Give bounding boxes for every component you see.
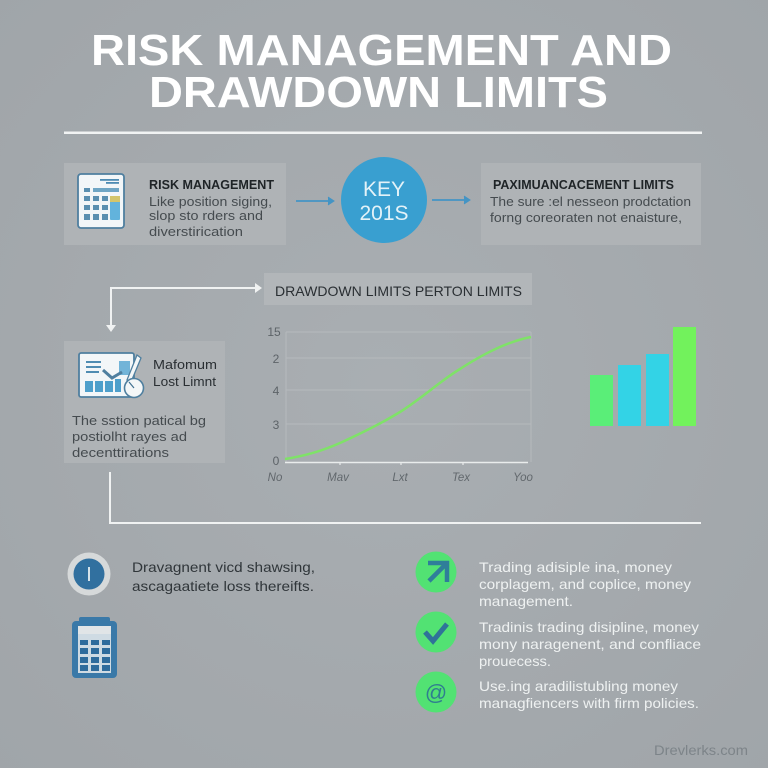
note text: ascagaatiete loss thereifts. (132, 578, 314, 594)
text: trading discipline one: corplagem, and coplice, money (479, 576, 691, 592)
text: trading discipline one: management. (479, 593, 573, 609)
panel heading: maximum lost limit: Mafomum (153, 358, 217, 372)
title (91, 26, 672, 117)
panel: maximum lost limit (64, 341, 225, 463)
panel text: maximum lost limit (72, 413, 206, 460)
title: RISK MANAGEMENT AND (91, 26, 672, 75)
panel heading: limits: PAXIMUANCACEMENT LIMITS (493, 178, 674, 192)
icon: calculator sheet (78, 174, 124, 228)
y axis labels (267, 325, 281, 468)
key circle (341, 157, 427, 243)
panel text: limits: forng coreoraten not enaisture, (490, 210, 682, 225)
panel text: maximum lost limit: decenttirations (72, 445, 170, 460)
panel heading: maximum lost limit (153, 358, 217, 389)
panel heading: risk management: RISK MANAGEMENT (149, 178, 274, 192)
icon: calculator (72, 617, 117, 678)
panel text: limits: The sure :el nesseon prodctation (490, 194, 691, 209)
panel text: risk management: diverstirication (149, 224, 243, 239)
bar chart (590, 327, 696, 426)
icon: at badge: @ (425, 680, 447, 705)
text: trading discipline one: Trading adisiple ina, money (479, 559, 672, 575)
text: trading discipline two: Tradinis trading disipline, money (479, 619, 699, 635)
panel text: maximum lost limit: postiolht rayes ad (72, 429, 187, 444)
icon: info circle (68, 552, 110, 596)
key circle: KEY (363, 178, 405, 201)
key circle: 201S (359, 202, 409, 225)
text: firm policies: managfiencers with firm policies. (479, 695, 699, 711)
arrow: to key circle (296, 197, 334, 205)
text: trading discipline two: prouecess. (479, 653, 551, 669)
footer watermark: Drevlerks.com (654, 743, 748, 758)
panel heading: maximum lost limit: Lost Limnt (153, 375, 217, 389)
text: trading discipline two: mony naragenent, and confliace (479, 636, 701, 652)
text: trading discipline two (479, 619, 701, 669)
panel: drawdown limits header: DRAWDOWN LIMITS PERTON LIMITS (275, 283, 522, 299)
x axis labels: Yoo (513, 472, 534, 484)
panel text: risk management: Like position siging, (149, 194, 272, 209)
x axis labels: Tex (452, 472, 471, 484)
title: DRAWDOWN LIMITS (149, 68, 608, 117)
line chart (267, 325, 534, 484)
text: firm policies (479, 678, 699, 711)
panel: drawdown limits header (264, 273, 532, 305)
y axis labels: 0 (273, 454, 280, 468)
y axis labels: 4 (273, 384, 280, 398)
y axis labels: 3 (273, 418, 280, 432)
note text: Dravagnent vicd shawsing, (132, 559, 315, 575)
icon: arrow badge (416, 552, 456, 592)
y axis labels: 2 (273, 352, 280, 366)
y axis labels: 15 (267, 325, 281, 339)
panel text: maximum lost limit: The sstion patical bg (72, 413, 206, 428)
icon: chart sheet with pen (79, 353, 144, 398)
panel text: limits (490, 194, 691, 225)
connector arrow (106, 283, 262, 332)
icon: at badge (416, 672, 456, 712)
chart line (285, 337, 531, 459)
panel text: risk management: slop sto rders and (149, 208, 263, 223)
icon: check badge (416, 612, 456, 652)
x axis labels: Mav (327, 472, 350, 484)
panel: limits (481, 163, 701, 245)
x axis labels: No (268, 472, 283, 484)
note text (132, 559, 315, 594)
panel text: risk management (149, 194, 272, 239)
divider connector (110, 472, 701, 523)
x axis labels (268, 472, 534, 484)
arrow: to limits panel (432, 196, 470, 204)
panel: risk management (64, 163, 286, 245)
x axis labels: Lxt (392, 472, 408, 484)
text: firm policies: Use.ing aradilistubling money (479, 678, 678, 694)
text: trading discipline one (479, 559, 691, 609)
